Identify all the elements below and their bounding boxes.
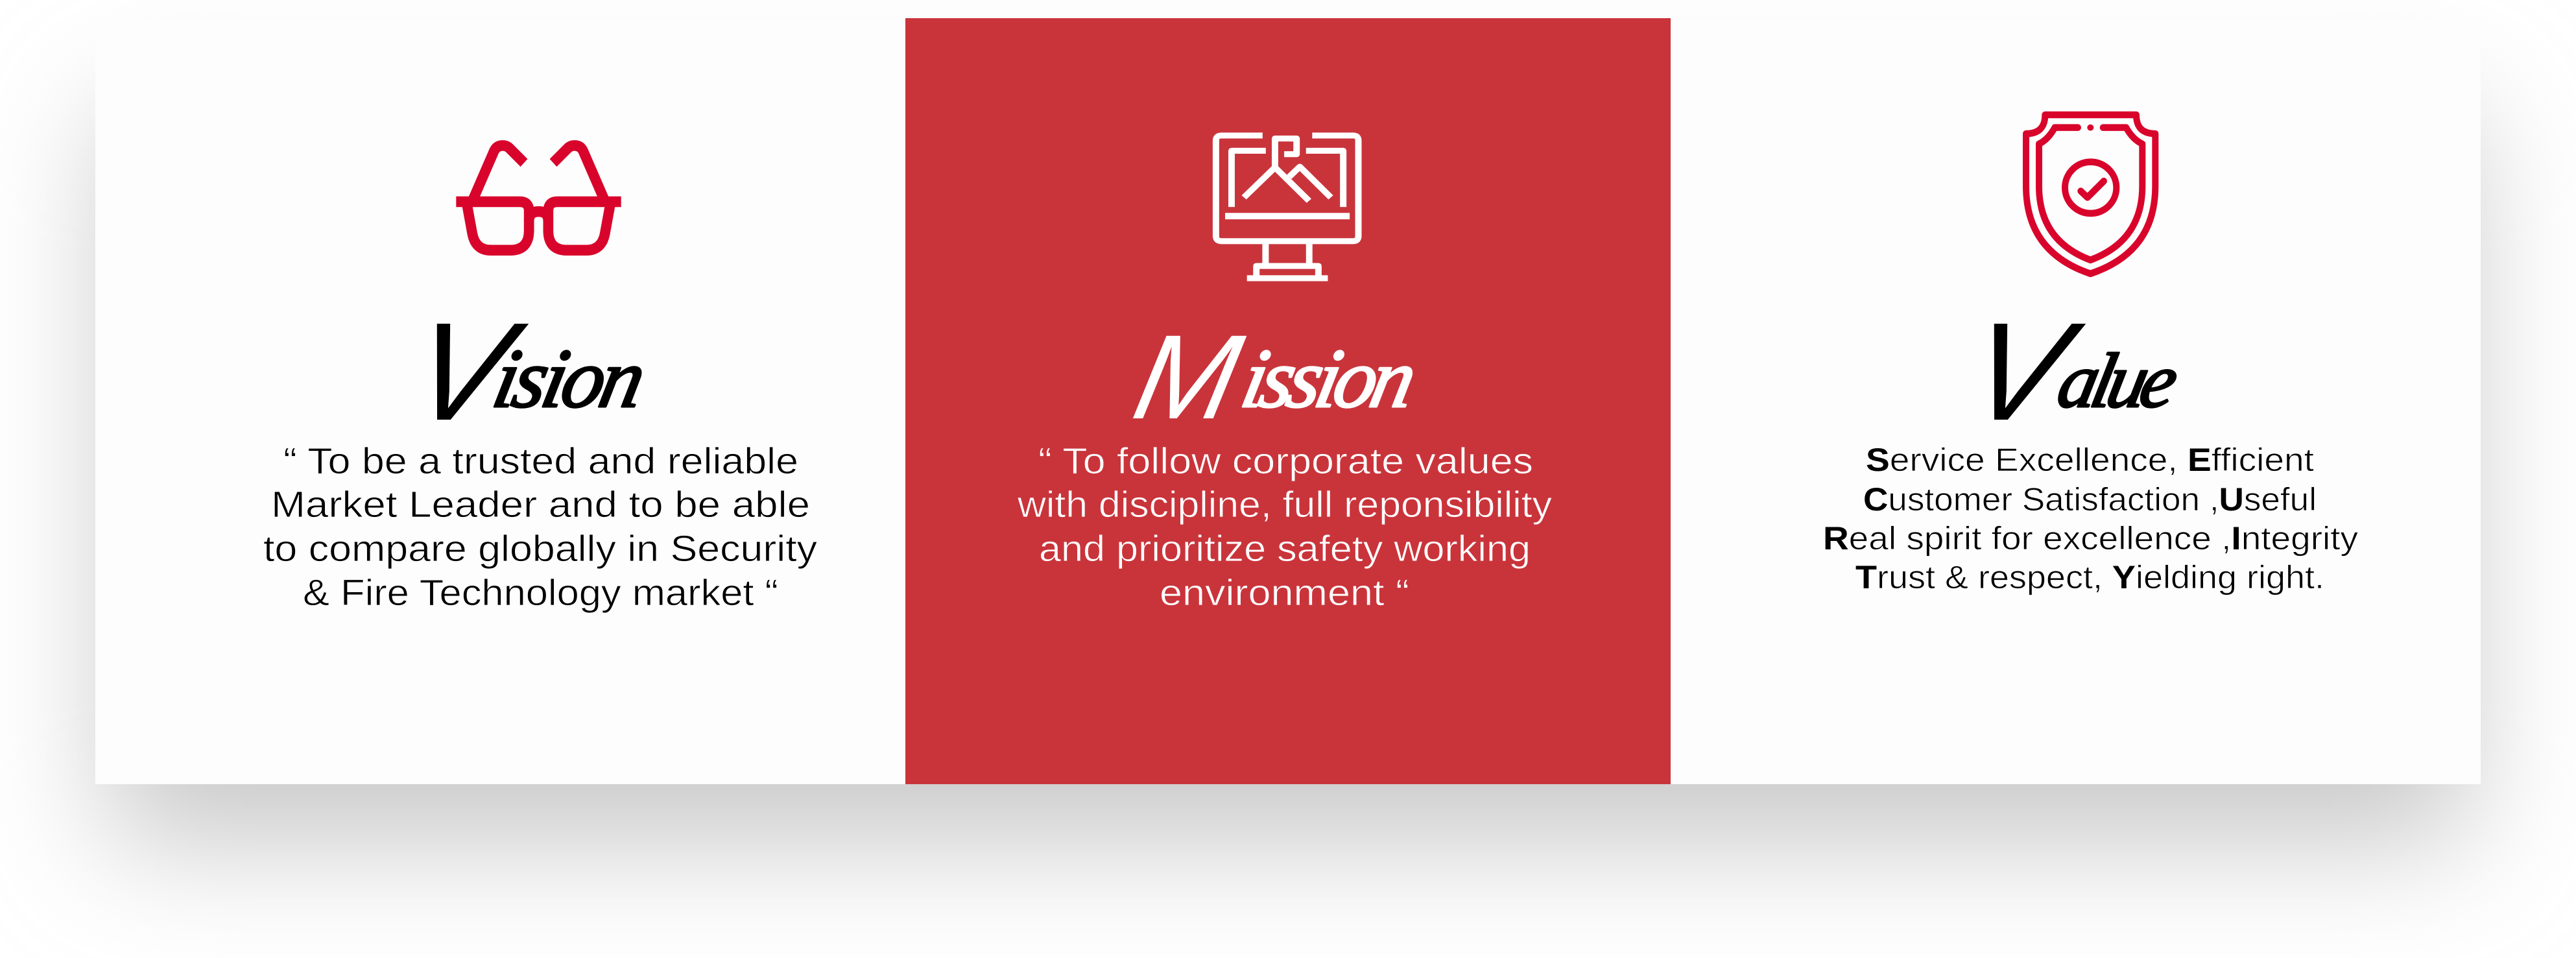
icon: shield with check <box>2026 115 2155 274</box>
drop shadow behind the card strip <box>107 110 2469 843</box>
text block: value statement: Trust & respect, Yielding right. <box>1855 559 2324 595</box>
heading: Mission: M <box>1124 310 1252 444</box>
heading: Vision: V <box>398 294 535 449</box>
panel: mission <box>905 18 1671 784</box>
text block: mission statement: and prioritize safety working <box>1039 528 1531 569</box>
text block: value statement: Real spirit for excellence , Integrity <box>1823 520 2358 557</box>
icon: monitor with mountain <box>1216 136 1359 278</box>
text block: value statement <box>1823 442 2358 595</box>
text block: mission statement <box>1017 440 1553 614</box>
text block: vision statement: Market Leader and to be able <box>271 484 810 525</box>
text block: mission statement: with discipline, full reponsibility <box>1017 484 1553 525</box>
text block: mission statement: environment “ <box>1160 572 1409 614</box>
text block: vision statement: & Fire Technology market “ <box>303 572 778 614</box>
text block: mission statement: “ To follow corporate values <box>1038 440 1533 482</box>
text block: vision statement: to compare globally in Security <box>263 528 818 569</box>
text block: vision statement: “ To be a trusted and reliable <box>283 440 798 482</box>
text block: value statement: Customer Satisfaction , Useful <box>1863 481 2317 518</box>
heading: Mission: ission <box>1234 332 1422 425</box>
heading: Value: alue <box>2051 338 2184 424</box>
panel: value <box>1671 19 2481 784</box>
panel: vision <box>95 19 905 784</box>
heading: Value: V <box>1955 294 2092 449</box>
icon: glasses <box>456 145 621 250</box>
heading: Vision: ision <box>486 332 651 425</box>
text block: vision statement <box>263 440 818 614</box>
text block: value statement: Service Excellence, Efficient <box>1866 442 2314 478</box>
